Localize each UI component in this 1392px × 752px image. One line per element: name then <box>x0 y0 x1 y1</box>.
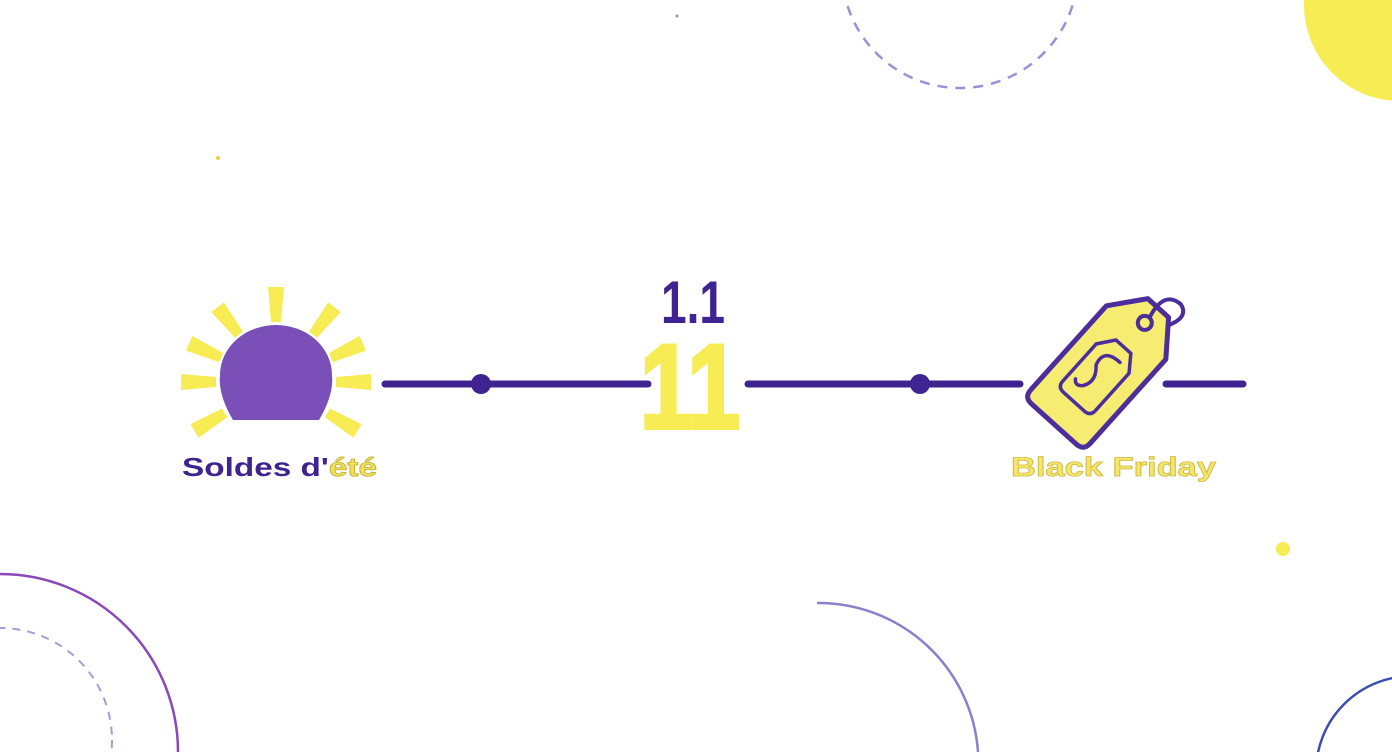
label: 11: 11 <box>640 320 740 454</box>
timeline line <box>385 380 1243 388</box>
decorative yellow circle top-right <box>1304 0 1392 101</box>
icon: price tag <box>1024 268 1200 451</box>
decorative arcs bottom-left <box>0 574 178 752</box>
label: 1.1: 1.1 <box>661 269 725 336</box>
decorative dots <box>216 14 1290 556</box>
decorative dashed circle top <box>842 0 1078 88</box>
decorative arc bottom-middle <box>817 603 978 752</box>
label: Black Friday: Black Friday <box>1011 452 1216 482</box>
decorative arc bottom-right <box>1316 676 1392 752</box>
icon: sun <box>181 287 371 438</box>
timeline dots <box>471 374 930 394</box>
label: Soldes d'été: Soldes d' été <box>182 452 377 482</box>
